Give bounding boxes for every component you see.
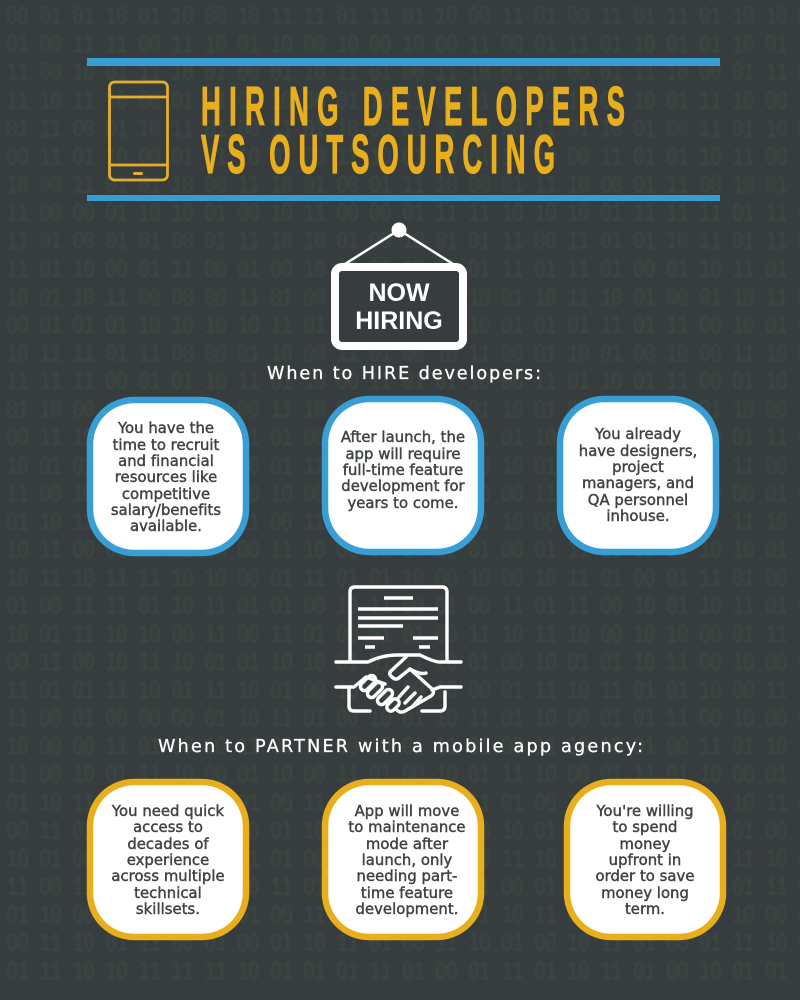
panel: partner card 2: to maintenance [348,819,466,836]
panel: partner card 3: to spend [613,819,677,836]
panel: partner card 1: skillsets. [136,901,200,918]
text: 00 11 00 10 11 10 01 01 10 10 01 01 11 10 01 00 10 01 01 10 11 00 10 00 01 [6,649,800,678]
text: 00 11 01 10 00 01 11 10 01 00 11 10 01 00 01 11 10 00 11 01 01 10 11 00 10 [6,143,800,172]
panel: hire card 2: app will require [345,446,461,463]
text: 01 11 00 01 10 11 01 00 11 01 10 00 01 11 10 00 11 01 10 01 00 11 01 10 00 [6,115,800,144]
text: 01 00 11 11 00 11 10 01 10 00 10 00 10 00 11 00 01 11 01 10 01 01 10 01 10 [6,31,800,60]
text: 11 00 10 01 11 00 01 10 10 00 11 01 11 01 10 00 11 10 01 01 11 10 00 01 01 [6,480,800,509]
panel: hire card 2: years to come. [347,495,459,512]
panel: partner card 3: upfront in [609,852,681,869]
panel: partner card 2: launch, only [362,852,453,869]
panel: partner card 2: App will move [355,803,459,820]
text: 11 00 10 01 11 10 00 01 10 00 11 01 00 10 01 11 10 00 01 11 01 10 00 01 10 [6,761,800,790]
panel: partner card 1: across multiple [111,868,225,885]
panel: hire card 1: You have the [117,420,214,437]
text: 01 11 10 10 11 11 11 10 01 01 01 11 01 00 01 11 01 10 11 01 00 10 01 01 10 [6,957,800,987]
text: 11 00 10 01 11 10 01 00 01 10 11 01 00 11 10 01 10 00 01 11 10 00 01 11 00 [6,59,800,88]
text: 00 01 01 01 10 10 10 10 11 01 10 00 11 01 10 01 01 01 11 01 11 00 10 01 00 [6,312,800,341]
text: 11 01 00 01 01 00 01 11 10 10 01 00 10 01 01 11 00 11 01 01 10 11 01 11 01 [6,227,800,257]
text: 11 00 11 01 10 00 01 10 11 01 10 00 01 10 11 00 01 11 10 01 00 10 01 11 00 [6,873,800,902]
panel: partner card 1: technical [134,885,202,902]
panel: partner card 3 [567,782,723,937]
panel: partner card 3: You're willing [595,803,694,820]
panel: partner card 3: order to save [595,868,695,885]
panel: partner card 1: access to [133,819,203,836]
text: 10 11 10 11 11 10 10 00 01 11 01 01 10 00 10 00 10 11 01 00 01 11 01 00 11 [6,564,800,593]
panel: hire card 3: You already [594,426,681,443]
text: 11 01 01 11 10 01 11 10 01 00 10 11 00 10 00 01 11 10 11 01 01 10 00 11 10 [6,677,800,706]
text: 11 01 10 00 01 11 00 01 00 10 11 01 10 00 01 11 01 11 01 00 01 10 11 01 10 [6,255,800,285]
panel: partner card 2: mode after [366,836,449,853]
text: 11 11 11 00 01 01 10 11 01 10 00 11 01 01 10 00 11 01 10 01 11 00 01 10 11 [6,368,800,397]
heading: when to hire: When to HIRE developers: [267,364,541,384]
panel: hire card 1: salary/benefits [111,502,221,519]
panel: hire card 2 [325,399,481,552]
panel: hire card 3: inhouse. [606,508,670,525]
text: 10 01 10 11 00 00 00 11 01 00 01 10 01 11 10 01 10 11 10 01 00 01 10 11 01 [6,284,800,313]
panel: hire card 2: development for [341,478,466,495]
text: 01 10 11 00 01 10 11 01 00 11 10 01 10 00 11 01 00 11 01 10 00 01 10 11 01 [6,789,800,818]
icon: now hiring sign: HIRING [355,307,443,335]
text: 00 11 10 01 11 00 01 00 01 10 11 01 00 11 10 01 00 10 11 01 00 01 11 10 00 [6,929,800,959]
text: 01 10 00 11 10 01 01 00 11 10 01 10 00 11 01 10 01 00 11 10 01 01 10 00 11 [6,396,800,425]
text: 10 00 00 11 01 00 10 11 01 10 00 10 01 11 01 00 11 10 10 01 00 11 01 10 11 [6,733,800,762]
text: 11 00 01 00 00 00 01 10 11 01 00 10 01 10 11 01 10 00 01 01 11 00 10 00 01 [6,705,800,734]
panel: partner card 1: You need quick [111,803,224,820]
icon: now hiring sign: NOW [368,279,430,307]
panel: partner card 1: experience [127,852,209,869]
panel: partner card 3: money long [601,885,689,902]
text: 00 01 01 10 01 10 00 10 11 11 01 11 01 10 00 11 01 00 11 01 11 01 10 10 01 [6,3,800,32]
panel: hire card 1: available. [130,518,202,535]
panel: partner card 3: term. [625,901,665,918]
text: 00 11 10 01 01 10 00 11 01 00 10 11 01 00 11 01 10 11 00 01 10 10 01 11 00 [6,424,800,453]
panel: partner card 1: decades of [127,836,209,853]
panel: partner card 2: development. [356,901,458,918]
panel: hire card 2: full-time feature [343,462,463,479]
text: 10 00 11 01 01 10 00 11 10 01 00 01 11 10 00 01 11 10 00 01 11 00 10 01 11 [6,171,800,200]
panel: partner card 2: time feature [361,885,453,902]
icon: contract handshake [336,587,461,713]
text: 10 11 11 01 11 00 00 01 10 00 11 01 00 10 11 00 01 10 01 00 10 00 11 10 01 [6,340,800,369]
panel: hire card 1 [90,400,246,553]
panel: hire card 3 [560,399,716,552]
icon: smartphone [110,82,168,180]
title: HIRING DEVELOPERS [201,77,625,138]
panel: partner card 2: needing part- [357,868,457,885]
panel: hire card 3: have designers, [579,443,697,460]
text: 11 10 11 10 00 01 11 01 10 00 01 10 11 00 01 01 10 11 00 10 01 11 10 00 11 [6,87,800,116]
panel: hire card 3: project [612,459,664,476]
text: 10 01 11 10 10 00 11 00 11 01 00 01 01 00 11 10 11 10 00 10 10 00 01 11 10 [6,621,800,650]
panel: hire card 1: time to recruit [113,437,220,454]
text: 00 11 01 10 00 01 11 10 01 10 00 11 01 11 00 10 01 01 10 00 11 10 01 00 11 [6,817,800,846]
heading: when to partner: When to PARTNER with a mobile app agency: [158,737,643,757]
text: 01 10 11 00 01 10 11 01 00 11 01 10 00 01 11 10 00 01 10 11 00 01 11 10 10 [6,508,800,537]
panel: hire card 1: resources like [115,469,217,486]
text: 10 01 01 11 00 10 11 00 01 11 00 01 10 11 00 10 01 00 11 10 00 01 11 00 10 [6,452,800,481]
text: 10 01 00 11 10 01 00 11 01 00 01 10 11 01 00 11 10 00 01 11 01 00 11 10 01 [6,845,800,874]
text: 01 10 00 10 01 11 10 01 00 11 01 10 11 00 01 10 11 01 00 10 11 01 10 00 01 [6,901,800,930]
text: 10 11 00 01 10 01 10 00 11 10 00 01 10 11 01 00 01 11 10 00 01 10 10 01 11 [6,536,800,565]
panel: hire card 1: and financial [118,453,214,470]
title: VS OUTSOURCING [201,125,555,186]
title banner [87,58,720,201]
panel: partner card 1 [90,782,246,937]
icon: now hiring sign [335,222,463,346]
panel: hire card 2: After launch, the [341,429,465,446]
panel: hire card 3: QA personnel [588,492,688,509]
text: 01 00 11 11 01 10 11 01 01 00 10 11 00 01 00 11 01 11 00 10 01 10 11 01 00 [6,592,800,622]
text: 11 00 00 01 10 10 01 00 10 11 00 00 01 11 11 10 10 10 01 11 11 11 01 11 01 [6,199,800,228]
title [201,77,625,186]
panel: partner card 2 [325,782,481,937]
panel: hire card 3: managers, and [582,475,694,492]
panel: hire card 1: competitive [122,486,210,503]
panel: partner card 3: money [620,836,671,853]
